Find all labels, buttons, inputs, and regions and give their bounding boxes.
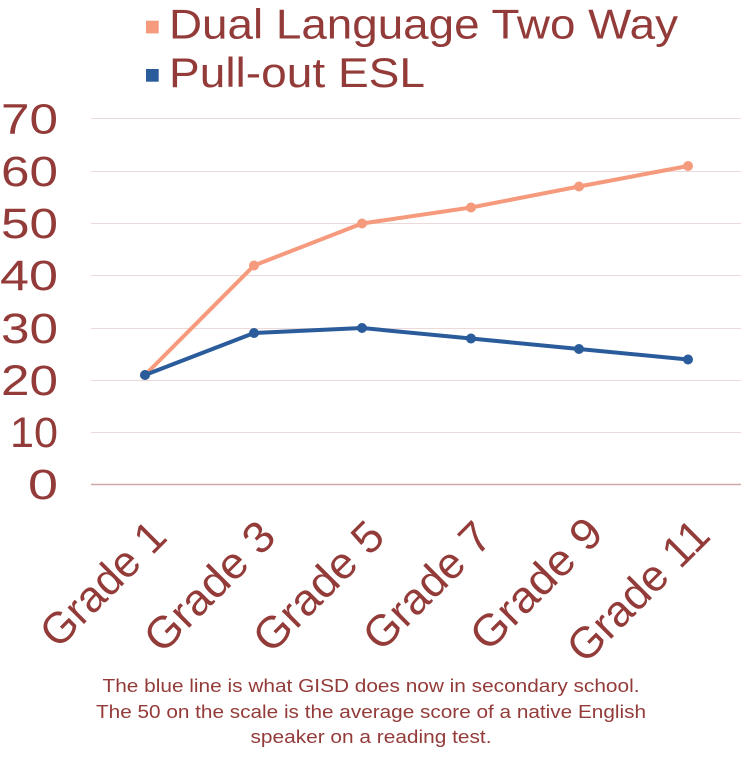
legend label: pull-out ESL: Pull-out ESL [169, 49, 425, 96]
x axis labels: Grade 11 [557, 510, 719, 672]
footnote: The 50 on the scale is the average score of a native English [96, 701, 646, 722]
x axis labels [30, 508, 719, 672]
footnote [96, 675, 646, 747]
x axis labels: Grade 7 [353, 512, 501, 660]
legend label: dual language: Dual Language Two Way [169, 0, 678, 48]
y axis labels: 40 [0, 252, 58, 300]
legend [146, 0, 678, 96]
y axis labels: 70 [1, 96, 58, 144]
series: dual language two way [140, 161, 693, 380]
x axis labels: Grade 5 [243, 511, 394, 662]
y axis labels: 50 [1, 200, 58, 248]
footnote: The blue line is what GISD does now in secondary school. [102, 675, 640, 696]
y axis labels: 60 [1, 148, 58, 196]
y axis labels: 30 [1, 305, 58, 353]
legend marker: pull-out ESL [146, 69, 159, 82]
y axis labels: 0 [28, 461, 58, 509]
x axis labels: Grade 3 [134, 511, 285, 662]
y axis labels: 20 [1, 357, 58, 405]
footnote: speaker on a reading test. [250, 726, 492, 747]
y axis labels: 10 [10, 409, 58, 457]
x axis labels: Grade 1 [30, 511, 176, 657]
legend marker: dual language [146, 21, 159, 33]
series: pull-out ESL [140, 323, 693, 380]
y axis labels [0, 96, 58, 509]
x axis labels: Grade 9 [460, 508, 612, 660]
